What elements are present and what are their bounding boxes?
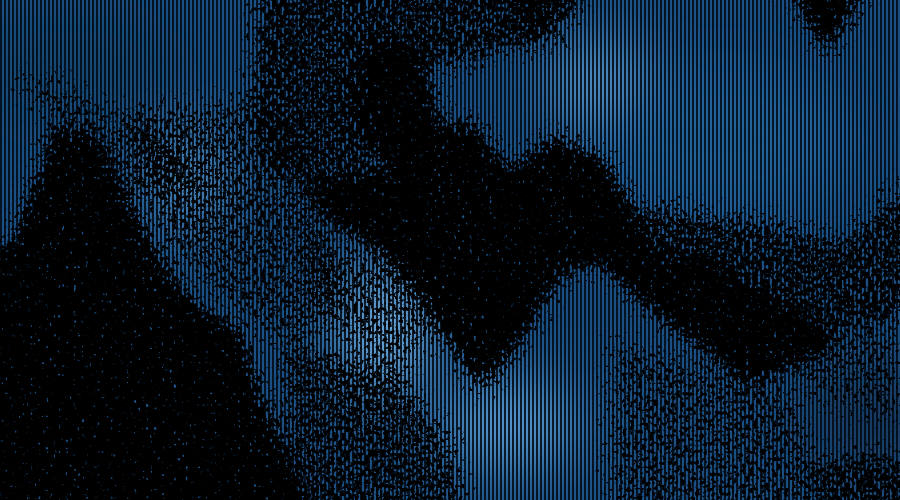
speckle: right side darkening xyxy=(780,300,900,420)
silhouette: right edge mass xyxy=(825,170,900,325)
speckle: upper right centre mound xyxy=(520,0,590,50)
silhouette: top dark mass xyxy=(350,40,442,170)
speckle: right of ridge xyxy=(640,205,850,315)
speckle: upper left flecks xyxy=(10,80,200,200)
silhouette: left mountain xyxy=(0,126,308,500)
speckle: middle lower xyxy=(300,230,440,370)
silhouette: top right triangle xyxy=(783,0,872,54)
speckle: lower centre xyxy=(280,340,470,500)
speckle: top centre xyxy=(250,0,590,170)
silhouette: central ridge xyxy=(300,118,834,390)
silhouette: bottom right blotch xyxy=(812,450,900,500)
speckle: left centre xyxy=(120,100,340,350)
speckle: lower right xyxy=(610,340,820,500)
